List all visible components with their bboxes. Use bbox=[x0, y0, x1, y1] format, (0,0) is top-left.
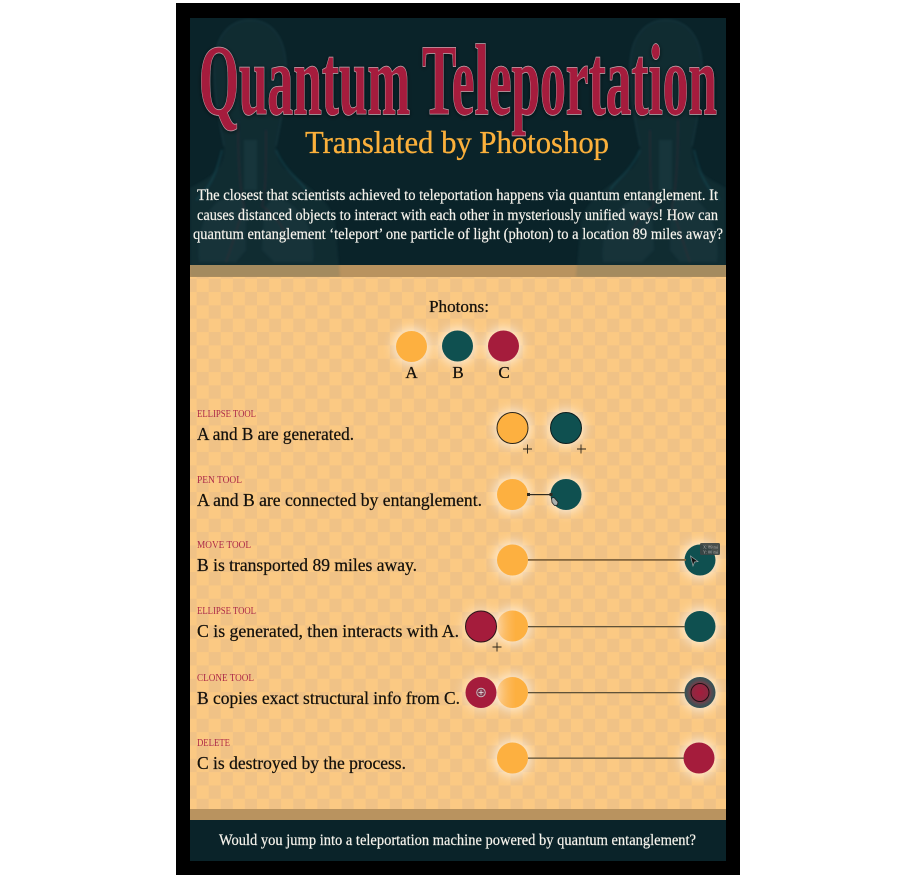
photon C with clone cursor bbox=[463, 674, 499, 710]
step 3: move tool bbox=[197, 540, 720, 578]
step 5 description: B copies exact structural info from C. bbox=[197, 688, 460, 708]
distance tooltip: X: 89 mi bbox=[703, 544, 719, 550]
step 5: clone tool bbox=[197, 673, 718, 710]
photon B bbox=[682, 608, 718, 644]
photon B being cloned bbox=[682, 674, 718, 710]
photon A bbox=[494, 476, 530, 512]
intro text: causes distanced objects to interact with each other in mysteriously unified ways! How can bbox=[197, 207, 718, 224]
photon C: C bbox=[498, 363, 510, 382]
step 6: delete bbox=[197, 738, 717, 776]
photon C outlined bbox=[463, 608, 499, 644]
icon: arrow cursor bbox=[690, 556, 698, 566]
entanglement line bbox=[528, 758, 684, 759]
photon B now C bbox=[681, 740, 717, 776]
photon B bbox=[682, 542, 718, 578]
photon B: B bbox=[452, 363, 464, 382]
icon: right body silhouette bbox=[576, 20, 726, 277]
entanglement line with anchors bbox=[527, 493, 552, 496]
distance tooltip bbox=[700, 543, 720, 555]
entanglement line bbox=[528, 692, 685, 693]
photon A bbox=[494, 542, 530, 578]
panel: checkerboard canvas bbox=[190, 265, 726, 820]
subtitle: Translated by Photoshop bbox=[305, 124, 609, 160]
photon A bbox=[494, 608, 530, 644]
photon A outlined bbox=[494, 410, 530, 446]
step 2: pen tool bbox=[197, 475, 584, 512]
photon A: A bbox=[405, 363, 418, 382]
step 4 tool label: ELLIPSE TOOL bbox=[197, 606, 256, 617]
intro text: The closest that scientists achieved to teleportation happens via quantum entanglement. It bbox=[197, 187, 719, 204]
distance tooltip: Y: 00 mi bbox=[703, 550, 719, 554]
icon: crosshair cursors bbox=[523, 444, 586, 454]
entanglement line bbox=[528, 626, 685, 627]
icon: crosshair cursor bbox=[492, 642, 502, 652]
step 4 description: C is generated, then interacts with A. bbox=[197, 621, 459, 641]
intro text bbox=[193, 187, 723, 243]
legend heading: Photons: bbox=[429, 297, 489, 316]
step 2 description: A and B are connected by entanglement. bbox=[197, 490, 482, 510]
step 1: ellipse tool bbox=[197, 409, 586, 454]
step 4: ellipse tool bbox=[197, 606, 718, 652]
band: bottom canvas edge bbox=[190, 809, 726, 820]
step 6 tool label: DELETE bbox=[197, 738, 230, 749]
footer question: Would you jump into a teleportation machine powered by quantum entanglement? bbox=[219, 832, 696, 849]
step 3 tool label: MOVE TOOL bbox=[197, 540, 251, 551]
entanglement line bbox=[528, 559, 686, 561]
legend: photons bbox=[394, 297, 522, 382]
panel: footer background bbox=[190, 820, 726, 861]
step 2 tool label: PEN TOOL bbox=[197, 475, 242, 486]
icon: left body silhouette bbox=[190, 20, 340, 277]
intro text: quantum entanglement ‘teleport’ one particle of light (photon) to a location 89 miles away? bbox=[193, 226, 723, 243]
photon B bbox=[548, 476, 584, 512]
step 1 tool label: ELLIPSE TOOL bbox=[197, 409, 256, 420]
photon A bbox=[494, 740, 530, 776]
band: top canvas edge bbox=[190, 265, 726, 277]
step 3 description: B is transported 89 miles away. bbox=[197, 555, 417, 575]
panel: header background bbox=[190, 18, 726, 265]
step 5 tool label: CLONE TOOL bbox=[197, 673, 254, 684]
photon A bbox=[494, 674, 530, 710]
step 1 description: A and B are generated. bbox=[197, 424, 354, 444]
icon: hand cursor bbox=[552, 498, 558, 506]
step 6 description: C is destroyed by the process. bbox=[197, 753, 406, 773]
poster background bbox=[176, 3, 740, 875]
photon B outlined bbox=[548, 410, 584, 446]
